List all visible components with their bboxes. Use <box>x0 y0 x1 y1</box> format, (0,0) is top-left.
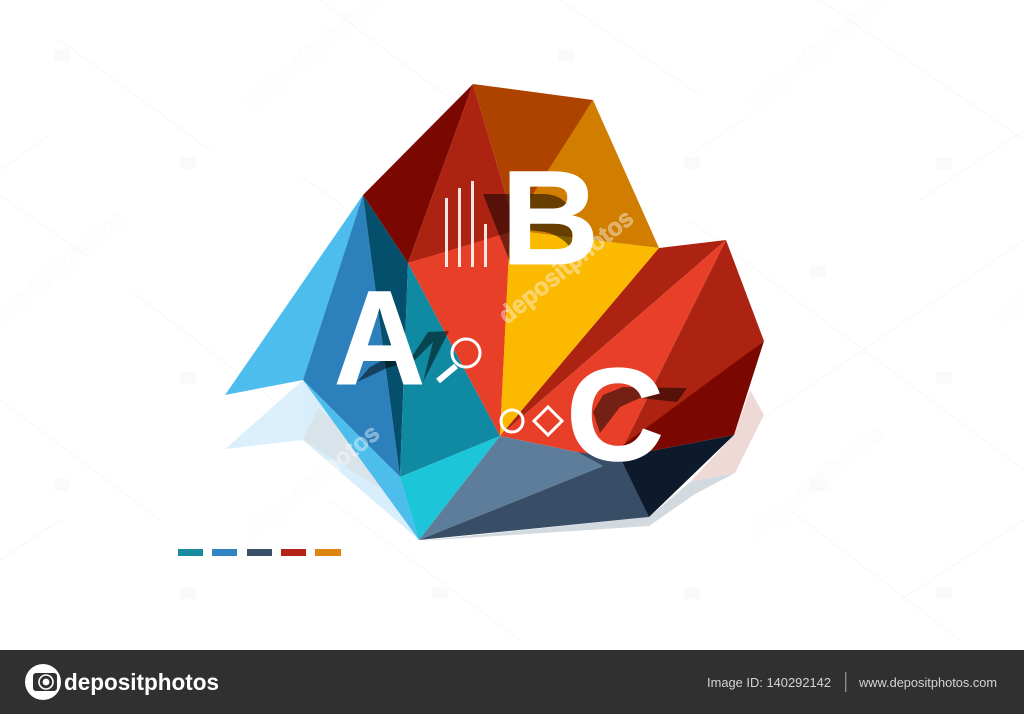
icon: bar chart <box>445 181 487 267</box>
shadow: letter C <box>593 387 687 433</box>
website url: www.depositphotos.com <box>858 676 997 690</box>
section C facets <box>419 240 764 540</box>
watermarks: depositphotos <box>743 419 889 545</box>
shadow: left wing <box>225 380 303 449</box>
reflection: soft shadows under the shape <box>225 380 764 541</box>
shadow: bottom grey <box>419 473 735 541</box>
image id: Image ID: 140292142 <box>707 676 831 690</box>
shadow: right pink <box>690 390 764 482</box>
letter shadows <box>357 194 687 433</box>
shadow: letter B <box>483 194 572 262</box>
footer bar <box>0 650 1024 714</box>
icon: magnifier <box>438 339 480 381</box>
watermarks: depositphotos <box>493 204 639 330</box>
shadow: grey overlap <box>303 408 400 487</box>
letter A: A <box>334 264 425 413</box>
legend colour bars <box>178 549 341 556</box>
letter B: B <box>501 144 599 293</box>
shadow: letter A <box>357 331 449 382</box>
logo wordmark: depositphotos <box>64 669 219 695</box>
icon: depositphotos camera logo <box>25 664 61 700</box>
section B facets <box>363 84 659 436</box>
watermarks: depositphotos <box>239 419 385 545</box>
section A facets <box>225 195 500 540</box>
icon: circle <box>501 410 523 432</box>
letter C: C <box>566 341 664 488</box>
low-poly shape <box>225 84 764 540</box>
shadow: lower blue strip <box>303 380 419 540</box>
watermarks <box>0 0 1024 545</box>
icon: diamond <box>534 407 562 435</box>
